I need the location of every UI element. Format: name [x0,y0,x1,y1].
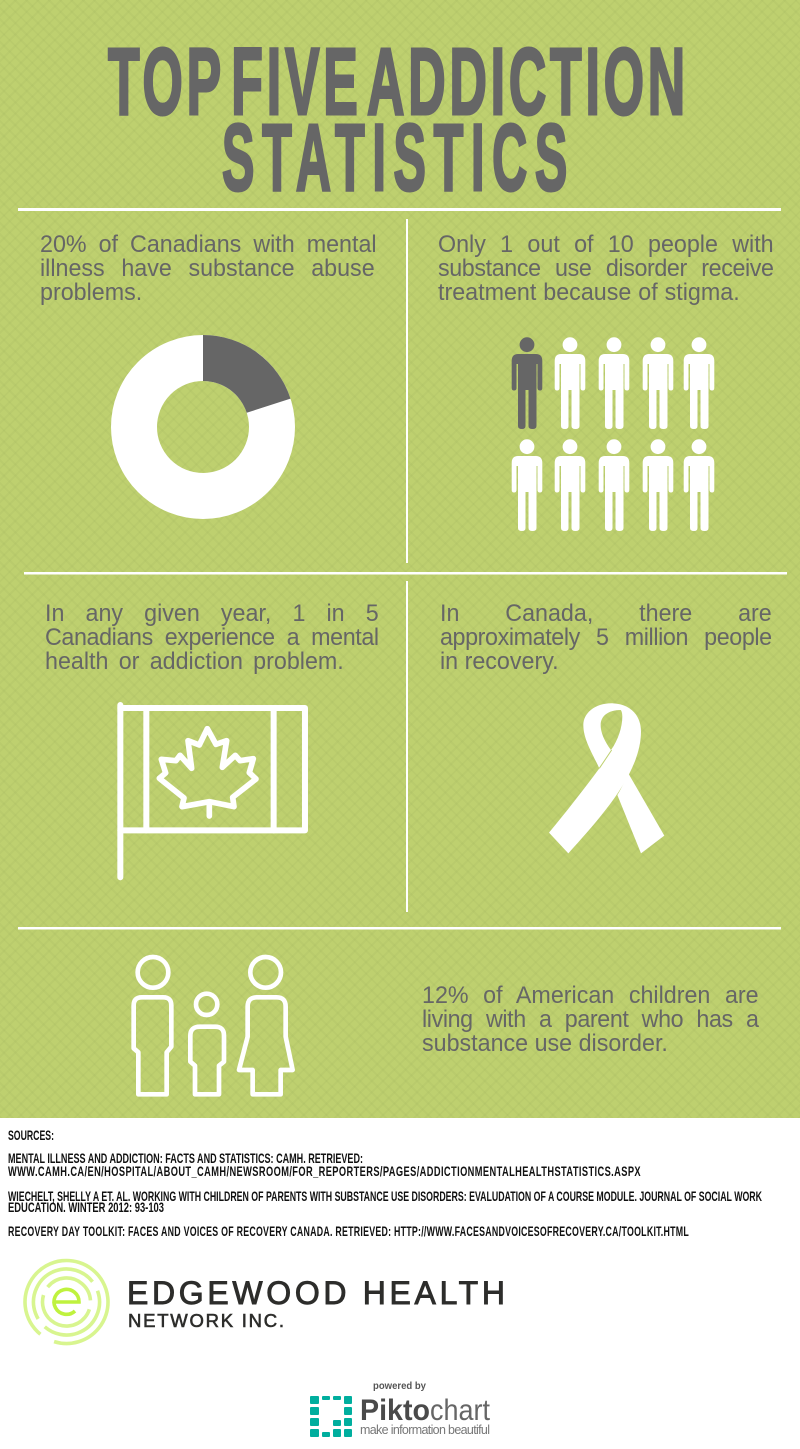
text: 20% of Canadians: problems. [40,279,142,306]
Piktochart wordmark: make information beautiful [360,1423,490,1437]
text: 20% of Canadians: illness have substance abuse [40,255,375,282]
icon: family outline [134,957,293,1094]
sources: MENTAL ILLNESS AND ADDICTION: FACTS AND STATISTICS: CAMH. RETRIEVED: [8,1150,363,1166]
text: 12% of American children [422,982,759,1057]
Piktochart wordmark: chart [430,1394,491,1427]
text: 20% of Canadians: 20% of Canadians with mental [40,231,377,258]
text: 12% of American children: 12% of American children are [422,982,759,1009]
Piktochart wordmark [360,1394,491,1437]
sources: EDUCATION. WINTER 2012: 93-103 [8,1199,164,1215]
text: 1 out of 10: substance use disorder receive [438,255,774,282]
sources: SOURCES: [8,1127,54,1143]
text: 1 out of 10: treatment because of stigma. [438,279,740,306]
text: 1 in 5 Canadians: health or addiction problem. [45,648,344,675]
powered by label: powered by [373,1380,426,1392]
text: 12% of American children: substance use disorder. [422,1030,668,1057]
text: 5 million in recovery: In Canada, there are [440,600,772,627]
Edgewood logo mark [8,1244,125,1360]
text: 5 million in recovery [440,600,772,675]
pictogram: 1 of 10 people [512,337,714,531]
Piktochart logo icon [310,1396,352,1437]
Edgewood name [127,1275,505,1331]
icon: highlighted person [512,337,542,429]
text: 1 out of 10: Only 1 out of 10 people with [438,231,774,258]
text: 1 in 5 Canadians: In any given year, 1 in 5 [45,600,379,627]
text: 5 million in recovery: approximately 5 million people [440,624,772,651]
Edgewood name: EDGEWOOD HEALTH [127,1275,505,1311]
icon: awareness ribbon [549,703,664,853]
Piktochart wordmark: Pikto [360,1394,430,1427]
text: 5 million in recovery: in recovery. [440,648,559,675]
text: 20% of Canadians [40,231,377,306]
text: 1 out of 10 [438,231,774,306]
icon: Canadian flag [120,705,305,877]
Edgewood name: NETWORK INC. [128,1310,284,1331]
sources [8,1127,762,1239]
text: 12% of American children: living with a parent who has a [422,1006,759,1033]
text: 1 in 5 Canadians [45,600,379,675]
green patterned background [0,0,800,1118]
donut chart: 20% [134,335,290,496]
text: 1 in 5 Canadians: Canadians experience a mental [45,624,379,651]
title [108,29,689,211]
